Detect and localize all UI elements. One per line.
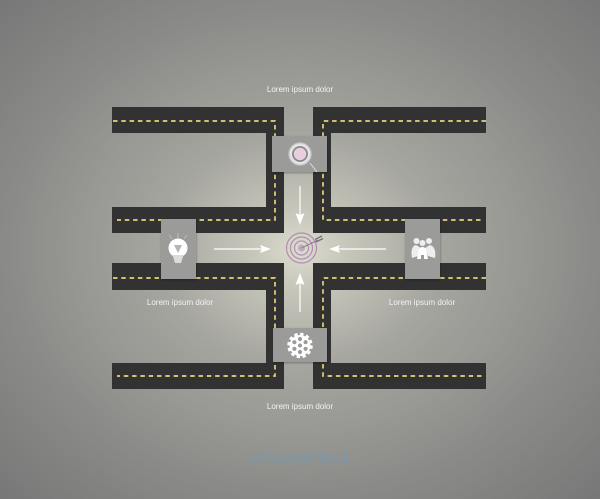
road: top right <box>313 107 486 233</box>
icon: people <box>411 238 435 259</box>
panel: top with lens icon <box>272 136 327 172</box>
panel: bottom with gear icon <box>273 328 327 362</box>
arrow: left <box>329 245 386 253</box>
label: bottom: Lorem ipsum dolor <box>267 402 333 411</box>
arrow: right <box>214 245 271 253</box>
label: left: Lorem ipsum dolor <box>147 298 213 307</box>
center target icon <box>286 233 323 263</box>
panel: right with people icon <box>405 219 440 279</box>
road: bottom left <box>112 263 284 389</box>
label: right: Lorem ipsum dolor <box>389 298 455 307</box>
title: infographics: INFOGRAPHICS <box>251 451 350 466</box>
icon: lens <box>288 142 317 172</box>
arrow: up <box>296 273 304 312</box>
label: top: Lorem ipsum dolor <box>267 85 333 94</box>
panel: left with light bulb icon <box>161 219 196 279</box>
icon: gear <box>288 334 312 357</box>
road: bottom right <box>313 263 486 389</box>
icon: light bulb <box>168 233 188 263</box>
road: top left <box>112 107 284 233</box>
arrow: down <box>296 186 304 225</box>
